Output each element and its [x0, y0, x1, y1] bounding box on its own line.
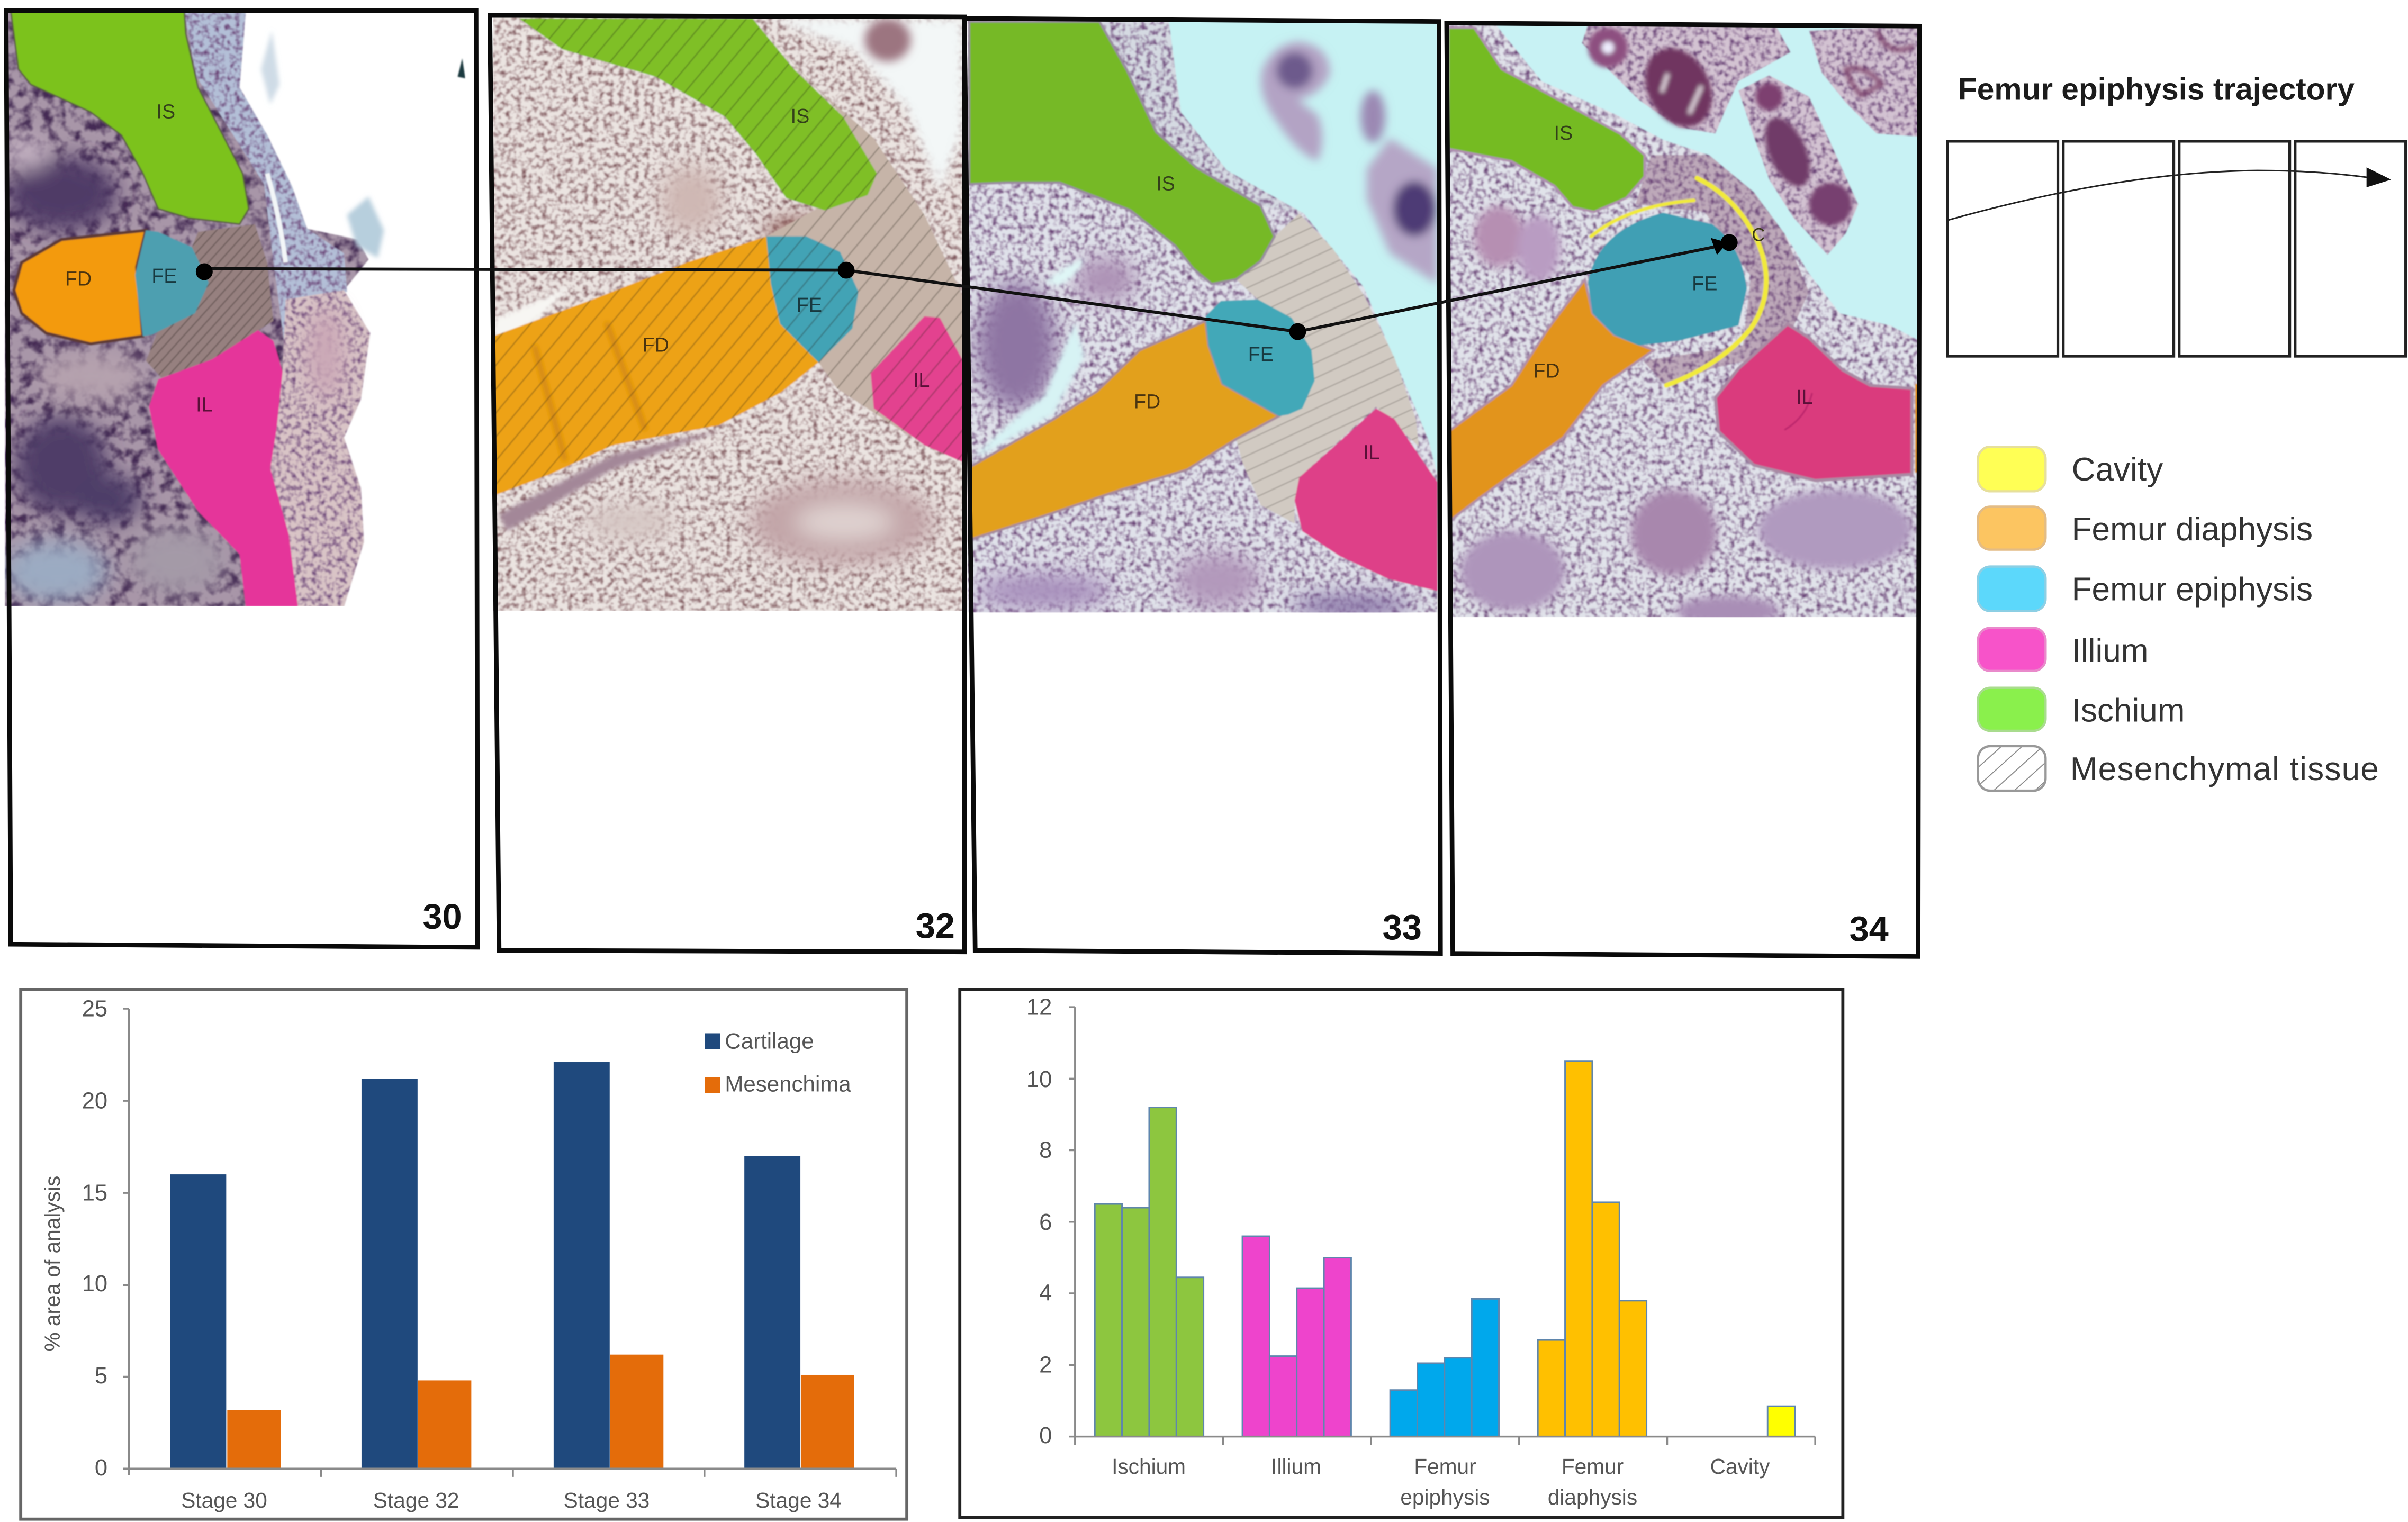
label IL: IL: [1796, 386, 1813, 408]
category labels: diaphysis: [1548, 1485, 1637, 1509]
stage number 30: 30: [422, 898, 462, 937]
ischium stage 30: [11, 11, 249, 224]
label IL: IL: [196, 394, 213, 416]
category labels: epiphysis: [1400, 1485, 1490, 1509]
category labels: Cavity: [1710, 1454, 1770, 1479]
ischium stage 32: [519, 19, 877, 210]
label IS: IS: [1554, 122, 1573, 144]
cavity bar: [1767, 1406, 1795, 1437]
femur epiphysis bars: [1390, 1299, 1499, 1437]
y axis ticks: 10: [82, 1271, 107, 1297]
tissue blobs stage 33: [1261, 41, 1437, 284]
femur epiphysis stage 34: [1588, 213, 1747, 346]
arrow: epiphysis trajectory across stages: [196, 234, 1738, 340]
legend item: ischium: Ischium: [2072, 693, 2185, 729]
legend item: mesenchymal tissue: Mesenchymal tissue: [2070, 751, 2379, 787]
femur diaphysis bars: [1538, 1061, 1647, 1437]
label C: C: [1752, 224, 1765, 245]
histology image stage 30: [3, 11, 465, 606]
illium stage 32: [871, 316, 963, 462]
mesenchima bars: [227, 1355, 854, 1469]
category labels: Illium: [1271, 1454, 1321, 1479]
label FD: FD: [65, 268, 92, 290]
cyan lumen stage 34: [1496, 24, 1919, 341]
histology image stage 34: [1448, 24, 1919, 627]
label FE: FE: [151, 265, 177, 287]
cavity outline: [1591, 178, 1766, 385]
heading: femur epiphysis trajectory: Femur epiphysis trajectory: [1958, 73, 2355, 107]
y axis ticks: 4: [1039, 1280, 1052, 1306]
histology image stage 32: [493, 17, 963, 611]
ischium stage 33: [969, 22, 1275, 284]
label FD: FD: [1134, 391, 1160, 413]
frame stage 34: [1447, 23, 1919, 956]
y axis ticks: [1026, 995, 1052, 1448]
y axis ticks: 0: [1039, 1423, 1052, 1448]
dark tissue cores stage 34: [1588, 28, 1914, 225]
label IL: IL: [1363, 441, 1379, 463]
illium stage 30: [149, 330, 298, 606]
stage number 33: 33: [1383, 909, 1422, 948]
label IS: IS: [1156, 173, 1175, 195]
category labels: Femur: [1414, 1454, 1476, 1479]
legend item: illium: [1978, 628, 2149, 671]
orange strip at edge: [1915, 384, 1919, 473]
category labels: Femur: [1562, 1454, 1624, 1479]
legend item: femur diaphysis: [1978, 506, 2313, 550]
label FD: FD: [643, 333, 669, 356]
label FE: FE: [1248, 343, 1274, 365]
ischium bars: [1095, 1108, 1204, 1437]
panel: stage 32: [490, 15, 964, 952]
y axis ticks: 6: [1039, 1210, 1052, 1235]
chart legend: [705, 1028, 851, 1097]
femur epiphysis stage 30: [135, 230, 209, 336]
mesenchymal tissue stage 33: [1236, 213, 1419, 523]
y axis ticks: 25: [82, 996, 107, 1022]
legend item: femur epiphysis: Femur epiphysis: [2072, 571, 2313, 608]
category labels: Stage 34: [755, 1488, 842, 1512]
category labels: Stage 30: [181, 1488, 267, 1512]
illium stage 34: [1716, 324, 1912, 481]
frame stage 32: [490, 15, 964, 952]
stage number 32: 32: [916, 907, 955, 946]
category labels: Ischium: [1112, 1454, 1186, 1479]
y axis ticks: 15: [82, 1181, 107, 1206]
label IS: IS: [791, 105, 809, 127]
category labels: [1112, 1454, 1770, 1509]
y axis title: % area of analysis: [40, 1176, 65, 1352]
mesenchymal tissue stage 32: [753, 19, 963, 462]
stage number 34: 34: [1850, 910, 1889, 949]
legend: [1978, 447, 2379, 791]
y axis ticks: 2: [1039, 1353, 1052, 1378]
illium bars: [1242, 1236, 1351, 1437]
frame stage 30: [6, 11, 477, 947]
femur diaphysis stage 32: [493, 237, 818, 496]
trajectory schematic: [1947, 141, 2406, 356]
category labels: [181, 1488, 842, 1512]
label FD: FD: [1533, 360, 1560, 382]
y axis ticks: [82, 996, 107, 1481]
legend item: cavity: Cavity: [2072, 451, 2163, 488]
y axis ticks: 12: [1026, 995, 1052, 1020]
frame stage 33: [964, 19, 1440, 954]
legend item: ischium: [1978, 688, 2185, 731]
legend item: femur diaphysis: Femur diaphysis: [2072, 511, 2313, 548]
bar chart: cartilage vs mesenchima: [21, 990, 907, 1519]
legend item: mesenchymal tissue: [1978, 746, 2379, 791]
label FE: FE: [797, 294, 822, 316]
category labels: Stage 32: [373, 1488, 459, 1512]
femur epiphysis stage 33: [1205, 300, 1314, 416]
cartilage bars: [170, 1062, 800, 1469]
chart legend: Mesenchima: [725, 1072, 851, 1097]
label IS: IS: [157, 100, 175, 122]
label IL: IL: [913, 369, 930, 391]
y axis ticks: 5: [95, 1363, 107, 1389]
legend item: cavity: [1978, 447, 2163, 491]
category labels: Stage 33: [564, 1488, 650, 1512]
y axis ticks: 8: [1039, 1137, 1052, 1163]
mesenchymal tissue stage 30: [146, 224, 273, 378]
femur diaphysis stage 33: [968, 321, 1279, 540]
femur diaphysis stage 34: [1448, 279, 1654, 522]
femur diaphysis stage 30: [14, 230, 146, 344]
label FE: FE: [1692, 272, 1717, 294]
cyan lumen stage 33: [1169, 20, 1437, 474]
ischium stage 34: [1448, 28, 1645, 212]
femur epiphysis stage 32: [766, 237, 859, 363]
bar chart: tissue areas by structure: [960, 990, 1843, 1518]
illium stage 33: [1295, 409, 1437, 591]
panel: stage 33: [964, 19, 1440, 954]
panel: stage 30: [3, 11, 477, 947]
y axis ticks: 0: [95, 1455, 107, 1481]
tissue collar around femoral head: [1636, 155, 1809, 387]
y axis ticks: 10: [1026, 1067, 1052, 1092]
histology image stage 33: [968, 20, 1437, 619]
y axis ticks: 20: [82, 1089, 107, 1114]
legend item: illium: Illium: [2072, 632, 2149, 669]
panel: stage 34: [1447, 23, 1919, 956]
chart legend: Cartilage: [725, 1028, 814, 1053]
legend item: femur epiphysis: [1978, 567, 2313, 611]
pale tissue strands stage 34: [1582, 24, 1919, 255]
